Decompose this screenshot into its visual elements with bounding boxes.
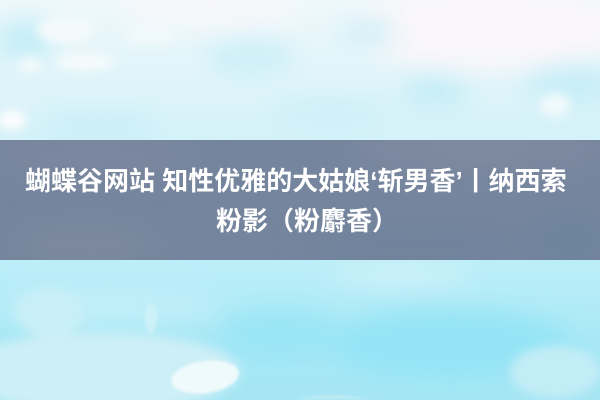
title (25, 166, 567, 236)
panel: title band (0, 140, 600, 260)
title: 粉影（粉麝香） (216, 206, 398, 236)
droplet highlights (169, 356, 241, 398)
title: 蝴蝶谷网站 知性优雅的大姑娘‘斩男香’丨纳西索 (25, 166, 567, 196)
